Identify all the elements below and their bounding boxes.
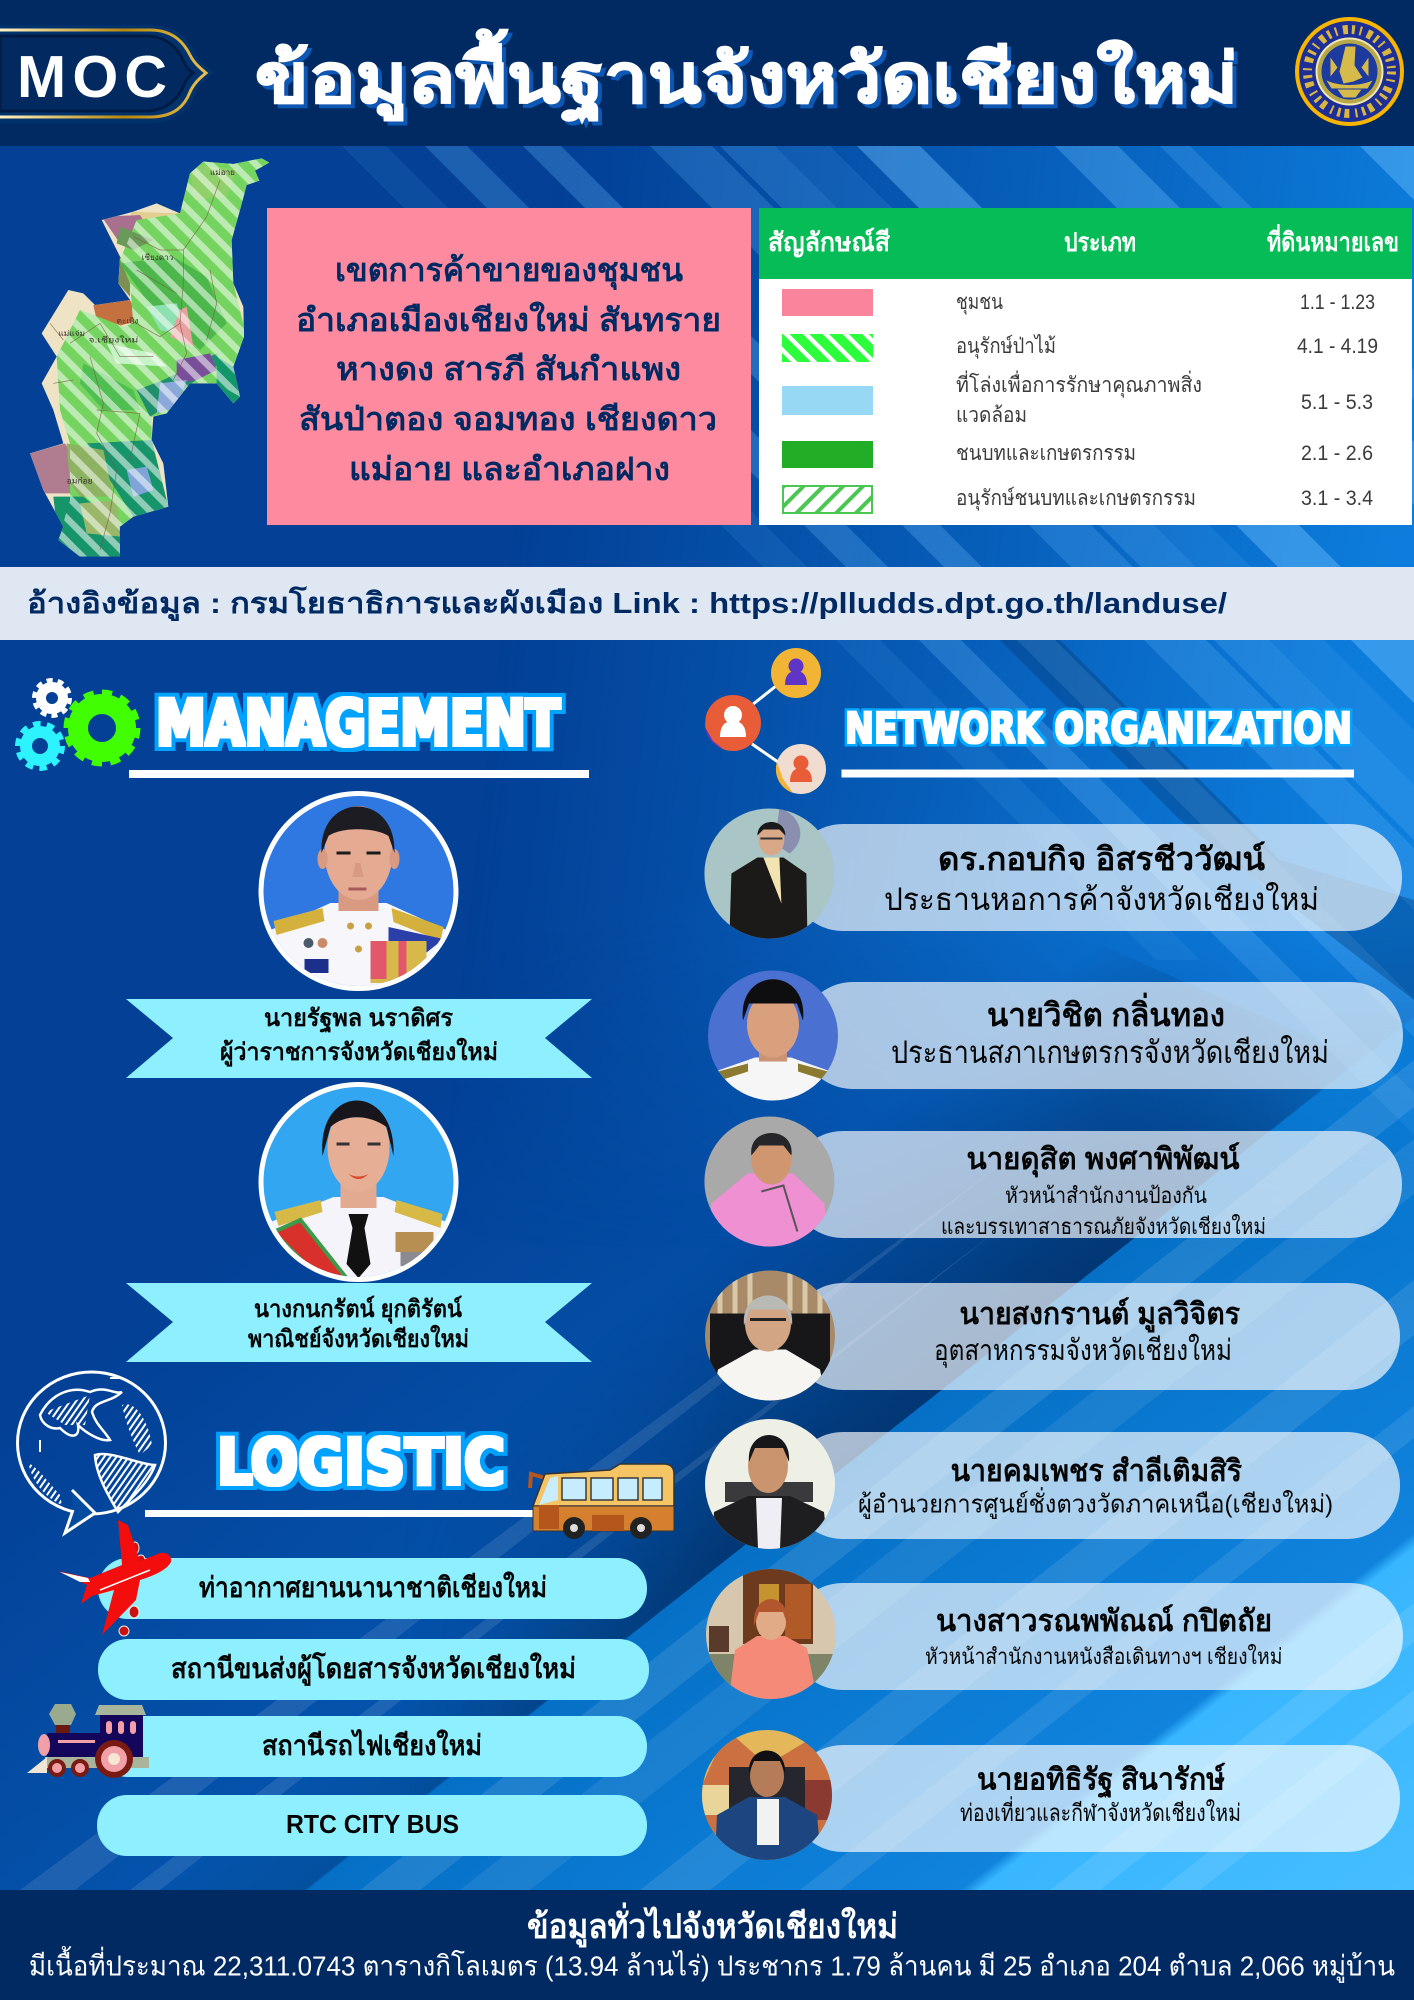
icon: gears xyxy=(18,680,137,768)
pill: city bus xyxy=(97,1795,647,1856)
MOC badge xyxy=(0,25,214,123)
panel: community trade zone: แม่อาย และอำเภอฝาง xyxy=(349,451,670,487)
panel: community trade zone: สันป่าตอง จอมทอง เชียงดาว xyxy=(299,401,717,437)
ribbon: governor: ผู้ว่าราชการจังหวัดเชียงใหม่ xyxy=(220,1037,498,1067)
network member 1: ประธานหอการค้าจังหวัดเชียงใหม่ xyxy=(884,882,1319,917)
photo xyxy=(704,1116,834,1246)
map of Chiang Mai: อมก๋อย xyxy=(67,476,93,485)
portrait: commerce officer xyxy=(258,1082,458,1287)
network member 7: นายอทิธิรัฐ สินารักษ์ xyxy=(977,1762,1226,1800)
ribbon: governor: นายรัฐพล นราดิศร xyxy=(264,1005,453,1034)
network member 3: หัวหน้าสำนักงานป้องกัน xyxy=(1005,1183,1207,1208)
pill: airport xyxy=(98,1558,647,1619)
panel: land use legend table: ชุมชน xyxy=(956,291,1003,315)
panel: land use legend table: ประเภท xyxy=(1064,227,1136,257)
ribbon: commerce officer: พาณิชย์จังหวัดเชียงใหม่ xyxy=(248,1324,469,1353)
panel: land use legend table: 5.1 - 5.3 xyxy=(1301,391,1373,414)
icon: network people xyxy=(705,648,826,794)
icon: person orange xyxy=(705,695,761,751)
map of Chiang Mai xyxy=(30,158,270,557)
panel: land use legend table: 2.1 - 2.6 xyxy=(1301,442,1373,465)
map of Chiang Mai: เชียงดาว xyxy=(142,253,173,262)
photo xyxy=(702,1730,832,1860)
source reference band xyxy=(0,567,1414,640)
map of Chiang Mai: แม่แจ่ม xyxy=(58,329,85,338)
panel: land use legend table xyxy=(759,208,1412,525)
photo xyxy=(705,1419,835,1549)
pill: city bus: RTC CITY BUS xyxy=(286,1809,459,1839)
network member 1: ดร.กอบกิจ อิสรชีววัฒน์ xyxy=(938,841,1265,877)
logistic list xyxy=(97,1558,649,1856)
panel: community trade zone: อำเภอเมืองเชียงใหม่ สันทราย xyxy=(296,301,721,338)
network member 4: อุตสาหกรรมจังหวัดเชียงใหม่ xyxy=(934,1333,1232,1368)
seal emblem xyxy=(1295,17,1404,126)
MOC badge: MOC xyxy=(17,44,167,110)
panel: land use legend table: อนุรักษ์ป่าไม้ xyxy=(956,334,1056,359)
network member 3: นายดุสิต พงศาพิพัฒน์ xyxy=(966,1142,1240,1178)
pill: railway station xyxy=(98,1716,647,1777)
network member 6 xyxy=(706,1569,1403,1699)
footer bar: ข้อมูลทั่วไปจังหวัดเชียงใหม่ xyxy=(527,1902,898,1948)
network member 6: หัวหน้าสำนักงานหนังสือเดินทางฯ เชียงใหม่ xyxy=(925,1644,1282,1669)
map of Chiang Mai: จ.เชียงใหม่ xyxy=(88,336,138,345)
icon: person cream xyxy=(776,744,826,794)
panel: land use legend table: แวดล้อม xyxy=(956,404,1027,427)
network member 5: ผู้อำนวยการศูนย์ชั่งตวงวัดภาคเหนือ(เชียงใหม่) xyxy=(858,1486,1333,1520)
network member 5 xyxy=(705,1419,1400,1549)
network member 7 xyxy=(702,1730,1400,1860)
panel: land use legend table: ที่โล่งเพื่อการรักษาคุณภาพสิ่ง xyxy=(956,370,1202,398)
pill: railway station: สถานีรถไฟเชียงใหม่ xyxy=(262,1729,482,1761)
portrait: governor xyxy=(258,791,458,991)
map of Chiang Mai: ตะเบิง xyxy=(117,316,138,325)
network member 1 xyxy=(704,808,1402,938)
heading: logistic: LOGISTIC xyxy=(217,1426,505,1499)
network member 3 xyxy=(704,1116,1402,1246)
network member 2: ประธานสภาเกษตรกรจังหวัดเชียงใหม่ xyxy=(891,1035,1329,1070)
pill: bus terminal xyxy=(98,1639,649,1700)
photo xyxy=(708,970,838,1100)
photo xyxy=(705,1270,835,1400)
icon: person purple xyxy=(771,648,821,698)
network member 2: นายวิชิต กลิ่นทอง xyxy=(987,992,1225,1033)
panel: community trade zone: หางดง สารภี สันกำแพง xyxy=(336,351,681,387)
header bar xyxy=(0,0,1414,146)
icon: bus xyxy=(530,1464,674,1539)
network member 7: ท่องเที่ยวและกีฬาจังหวัดเชียงใหม่ xyxy=(960,1796,1241,1827)
network member 3: และบรรเทาสาธารณภัยจังหวัดเชียงใหม่ xyxy=(941,1214,1266,1239)
network member 6: นางสาวรณพพัณณ์ กปิตถัย xyxy=(936,1604,1272,1638)
pill: airport: ท่าอากาศยานนานาชาติเชียงใหม่ xyxy=(199,1571,547,1603)
icon: globe speech bubble xyxy=(18,1372,166,1533)
heading: management: MANAGEMENT xyxy=(156,687,560,760)
panel: land use legend table: สัญลักษณ์สี xyxy=(768,227,890,258)
panel: land use legend table: 4.1 - 4.19 xyxy=(1297,335,1378,358)
photo xyxy=(706,1569,836,1699)
panel: community trade zone xyxy=(267,208,751,525)
network member 5: นายคมเพชร สำลีเติมสิริ xyxy=(951,1455,1242,1488)
panel: land use legend table: 1.1 - 1.23 xyxy=(1300,291,1375,314)
footer bar xyxy=(0,1890,1414,2000)
source reference band: อ้างอิงข้อมูล : กรมโยธาธิการและผังเมือง Link : https://plludds.dpt.go.th/landuse/ xyxy=(27,585,1227,621)
network member 4: นายสงกรานต์ มูลวิจิตร xyxy=(960,1297,1240,1333)
icon: steam train xyxy=(27,1704,149,1778)
network member 2 xyxy=(708,970,1403,1100)
icon: airplane xyxy=(58,1520,171,1636)
network member 4 xyxy=(705,1270,1400,1400)
ribbon: commerce officer: นางกนกรัตน์ ยุกติรัตน์ xyxy=(254,1295,463,1325)
photo xyxy=(704,808,834,938)
pill: bus terminal: สถานีขนส่งผู้โดยสารจังหวัดเชียงใหม่ xyxy=(171,1651,576,1686)
panel: land use legend table: ชนบทและเกษตรกรรม xyxy=(956,442,1136,465)
title: ข้อมูลพื้นฐานจังหวัดเชียงใหม่ xyxy=(255,28,1238,123)
panel: land use legend table: อนุรักษ์ชนบทและเกษตรกรรม xyxy=(956,486,1196,511)
map of Chiang Mai: แม่อาย xyxy=(210,168,235,177)
ribbon: commerce officer xyxy=(126,1283,592,1362)
panel: land use legend table: 3.1 - 3.4 xyxy=(1301,487,1373,510)
ribbon: governor xyxy=(126,999,592,1078)
panel: community trade zone: เขตการค้าขายของชุมชน xyxy=(335,252,683,291)
